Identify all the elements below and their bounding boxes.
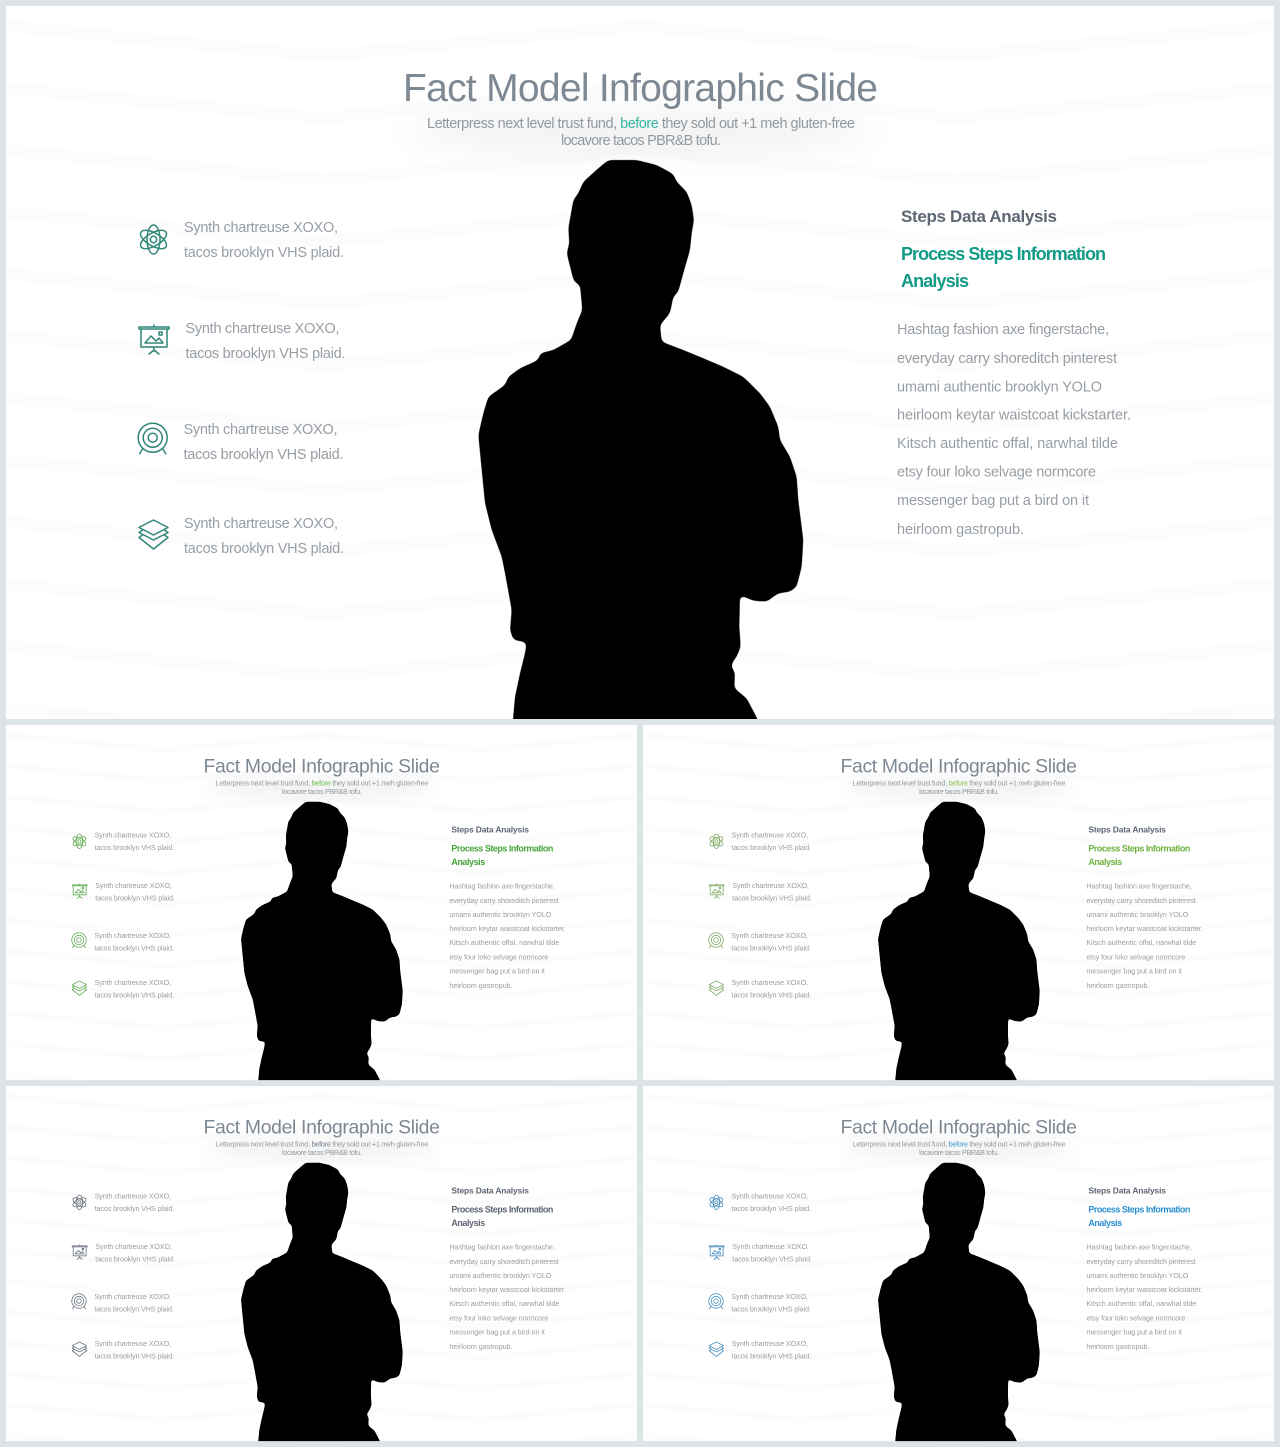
subtitle text (215, 779, 428, 796)
body paragraph: heirloom keytar waistcoat kickstarter. (1086, 924, 1203, 933)
panel: main teal slide (6, 6, 1274, 735)
panel: small grey slide (6, 1086, 637, 1447)
subtitle text (215, 1140, 428, 1157)
feature item: presentation board: Synth chartreuse XOXO, (732, 1242, 809, 1251)
body paragraph: heirloom keytar waistcoat kickstarter. (449, 1285, 566, 1294)
feature item: atom: Synth chartreuse XOXO, (732, 831, 808, 840)
silhouette of a man with crossed arms (878, 1163, 1040, 1447)
feature item: target (709, 931, 811, 953)
feature item: atom: Synth chartreuse XOXO, (95, 831, 171, 840)
body paragraph: messenger bag put a bird on it (897, 493, 1089, 509)
feature item: presentation board: Synth chartreuse XOXO, (732, 881, 809, 890)
body paragraph: etsy four loko selvage normcore (1086, 952, 1185, 961)
feature item: atom (72, 831, 174, 852)
feature item: target (72, 931, 174, 953)
feature item: presentation board: tacos brooklyn VHS plaid. (95, 1254, 175, 1263)
silhouette of a man with crossed arms (241, 802, 403, 1088)
body paragraph: umami authentic brooklyn YOLO (1086, 910, 1189, 919)
feature item: atom (72, 1192, 174, 1213)
body paragraph: Kitsch authentic offal, narwhal tilde (449, 938, 559, 947)
feature item: target: Synth chartreuse XOXO, (731, 1292, 808, 1301)
feature item: target: tacos brooklyn VHS plaid. (184, 447, 344, 463)
body paragraph: messenger bag put a bird on it (449, 966, 545, 976)
feature item: presentation board: tacos brooklyn VHS plaid. (186, 346, 346, 362)
feature item: layers (72, 1339, 174, 1360)
body paragraph: everyday carry shoreditch pinterest (1086, 896, 1196, 905)
feature item: atom (709, 831, 811, 852)
feature item: presentation board (709, 881, 812, 902)
heading: process steps (451, 1204, 553, 1228)
feature item: layers: Synth chartreuse XOXO, (184, 516, 338, 532)
title: Fact Model Infographic Slide (841, 1116, 1077, 1138)
subtitle text: locavore tacos PBR&B tofu. (561, 133, 721, 149)
body paragraph: messenger bag put a bird on it (1086, 1327, 1182, 1337)
body paragraph: etsy four loko selvage normcore (449, 1313, 548, 1322)
subtitle text (852, 779, 1065, 796)
feature item: presentation board: Synth chartreuse XOXO, (95, 1242, 172, 1251)
body paragraph: Hashtag fashion axe fingerstache, (449, 881, 555, 890)
feature item: atom: tacos brooklyn VHS plaid. (184, 245, 344, 261)
heading: steps data analysis: Steps Data Analysis (1088, 1186, 1166, 1196)
heading: process steps: Analysis (1088, 1218, 1122, 1228)
panel: small blue slide (643, 1086, 1274, 1447)
feature item: atom: tacos brooklyn VHS plaid. (732, 1204, 811, 1213)
feature item: presentation board: tacos brooklyn VHS plaid. (732, 1254, 812, 1263)
silhouette of a man with crossed arms (878, 802, 1040, 1088)
feature item: atom: tacos brooklyn VHS plaid. (732, 843, 811, 852)
feature item: atom: tacos brooklyn VHS plaid. (95, 1204, 174, 1213)
title: Fact Model Infographic Slide (204, 1116, 440, 1138)
feature item: layers: Synth chartreuse XOXO, (95, 978, 171, 987)
body paragraph: Kitsch authentic offal, narwhal tilde (1086, 938, 1196, 947)
silhouette of a man with crossed arms (478, 160, 803, 735)
heading: process steps: Process Steps Information (451, 843, 553, 853)
feature item: target (709, 1292, 811, 1314)
feature item: layers: tacos brooklyn VHS plaid. (732, 990, 811, 999)
body paragraph: Hashtag fashion axe fingerstache, (449, 1242, 555, 1251)
body paragraph (449, 881, 566, 990)
title: Fact Model Infographic Slide (204, 755, 440, 777)
heading: process steps: Analysis (901, 271, 969, 291)
subtitle text: locavore tacos PBR&B tofu. (919, 787, 999, 796)
feature item: target: tacos brooklyn VHS plaid. (731, 1305, 811, 1314)
subtitle text: Letterpress next level trust fund, before they sold out +1 meh gluten-free (215, 779, 428, 788)
feature item: layers (709, 978, 811, 999)
body paragraph: heirloom keytar waistcoat kickstarter. (449, 924, 566, 933)
heading: process steps: Process Steps Information (1088, 843, 1190, 853)
heading: process steps: Analysis (451, 1218, 485, 1228)
heading: steps data analysis: Steps Data Analysis (1088, 825, 1166, 835)
feature item: layers: tacos brooklyn VHS plaid. (184, 541, 344, 557)
subtitle text (852, 1140, 1065, 1157)
feature item: target (138, 422, 344, 463)
feature item: presentation board (72, 881, 175, 902)
body paragraph: Kitsch authentic offal, narwhal tilde (897, 436, 1118, 452)
title: Fact Model Infographic Slide (841, 755, 1077, 777)
body paragraph: etsy four loko selvage normcore (897, 464, 1096, 480)
subtitle text: locavore tacos PBR&B tofu. (919, 1148, 999, 1157)
feature item: presentation board: tacos brooklyn VHS plaid. (732, 893, 812, 902)
feature item: atom: Synth chartreuse XOXO, (732, 1192, 808, 1201)
heading: steps data analysis: Steps Data Analysis (451, 1186, 529, 1196)
heading: steps data analysis: Steps Data Analysis (901, 207, 1057, 226)
feature item: atom: tacos brooklyn VHS plaid. (95, 843, 174, 852)
heading: process steps (1088, 843, 1190, 867)
body paragraph: umami authentic brooklyn YOLO (897, 380, 1102, 396)
body paragraph: everyday carry shoreditch pinterest (897, 351, 1117, 367)
body paragraph (449, 1242, 566, 1351)
subtitle text: locavore tacos PBR&B tofu. (282, 787, 362, 796)
panel: small green slide (6, 725, 637, 1088)
feature item: presentation board: Synth chartreuse XOXO, (95, 881, 172, 890)
body paragraph (1086, 881, 1203, 990)
body paragraph: everyday carry shoreditch pinterest (449, 896, 559, 905)
feature item: layers: Synth chartreuse XOXO, (95, 1339, 171, 1348)
heading: process steps: Analysis (1088, 857, 1122, 867)
body paragraph: etsy four loko selvage normcore (449, 952, 548, 961)
body paragraph: Hashtag fashion axe fingerstache, (897, 322, 1109, 338)
heading: process steps: Analysis (451, 857, 485, 867)
feature item: presentation board: tacos brooklyn VHS plaid. (95, 893, 175, 902)
body paragraph: heirloom gastropub. (449, 981, 513, 990)
body paragraph: umami authentic brooklyn YOLO (1086, 1271, 1189, 1280)
silhouette of a man with crossed arms (241, 1163, 403, 1447)
feature item: atom (138, 220, 344, 261)
body paragraph: Hashtag fashion axe fingerstache, (1086, 881, 1192, 890)
body paragraph: everyday carry shoreditch pinterest (1086, 1257, 1196, 1266)
title: Fact Model Infographic Slide (403, 67, 878, 110)
heading: process steps (1088, 1204, 1190, 1228)
feature item: presentation board: Synth chartreuse XOXO, (186, 321, 340, 337)
feature item: target: tacos brooklyn VHS plaid. (94, 1305, 174, 1314)
body paragraph (897, 322, 1131, 538)
heading: process steps (901, 244, 1106, 291)
heading: process steps (451, 843, 553, 867)
body paragraph: Kitsch authentic offal, narwhal tilde (1086, 1299, 1196, 1308)
heading: process steps: Process Steps Information (901, 244, 1106, 264)
feature item: target: Synth chartreuse XOXO, (731, 931, 808, 940)
body paragraph: messenger bag put a bird on it (449, 1327, 545, 1337)
feature item: layers: tacos brooklyn VHS plaid. (95, 1351, 174, 1360)
feature item: atom (709, 1192, 811, 1213)
feature item: layers (72, 978, 174, 999)
subtitle text: Letterpress next level trust fund, before they sold out +1 meh gluten-free (427, 116, 855, 132)
feature item: layers: Synth chartreuse XOXO, (732, 978, 808, 987)
body paragraph: everyday carry shoreditch pinterest (449, 1257, 559, 1266)
subtitle text: Letterpress next level trust fund, before they sold out +1 meh gluten-free (852, 1140, 1065, 1149)
body paragraph: heirloom keytar waistcoat kickstarter. (1086, 1285, 1203, 1294)
subtitle text (427, 116, 855, 149)
feature item: layers: tacos brooklyn VHS plaid. (732, 1351, 811, 1360)
feature item: target: Synth chartreuse XOXO, (94, 1292, 171, 1301)
feature item: layers (709, 1339, 811, 1360)
body paragraph: Kitsch authentic offal, narwhal tilde (449, 1299, 559, 1308)
subtitle text: Letterpress next level trust fund, before they sold out +1 meh gluten-free (215, 1140, 428, 1149)
feature item: layers (139, 516, 344, 557)
body paragraph: messenger bag put a bird on it (1086, 966, 1182, 976)
feature item: target: Synth chartreuse XOXO, (94, 931, 171, 940)
body paragraph: heirloom gastropub. (897, 522, 1024, 538)
feature item: presentation board (139, 321, 346, 362)
feature item: presentation board (709, 1242, 812, 1263)
body paragraph: umami authentic brooklyn YOLO (449, 1271, 552, 1280)
body paragraph: umami authentic brooklyn YOLO (449, 910, 552, 919)
feature item: target: Synth chartreuse XOXO, (184, 422, 338, 438)
heading: process steps: Process Steps Information (451, 1204, 553, 1214)
body paragraph (1086, 1242, 1203, 1351)
heading: process steps: Process Steps Information (1088, 1204, 1190, 1214)
body paragraph: heirloom gastropub. (1086, 981, 1150, 990)
feature item: presentation board (72, 1242, 175, 1263)
feature item: target: tacos brooklyn VHS plaid. (731, 944, 811, 953)
feature item: layers: tacos brooklyn VHS plaid. (95, 990, 174, 999)
feature item: atom: Synth chartreuse XOXO, (184, 220, 338, 236)
body paragraph: heirloom gastropub. (449, 1342, 513, 1351)
subtitle text: Letterpress next level trust fund, before they sold out +1 meh gluten-free (852, 779, 1065, 788)
subtitle text: locavore tacos PBR&B tofu. (282, 1148, 362, 1157)
body paragraph: heirloom keytar waistcoat kickstarter. (897, 408, 1131, 424)
panel: small lime slide (643, 725, 1274, 1088)
body paragraph: heirloom gastropub. (1086, 1342, 1150, 1351)
feature item: layers: Synth chartreuse XOXO, (732, 1339, 808, 1348)
feature item: target: tacos brooklyn VHS plaid. (94, 944, 174, 953)
heading: steps data analysis: Steps Data Analysis (451, 825, 529, 835)
feature item: atom: Synth chartreuse XOXO, (95, 1192, 171, 1201)
body paragraph: Hashtag fashion axe fingerstache, (1086, 1242, 1192, 1251)
body paragraph: etsy four loko selvage normcore (1086, 1313, 1185, 1322)
feature item: target (72, 1292, 174, 1314)
